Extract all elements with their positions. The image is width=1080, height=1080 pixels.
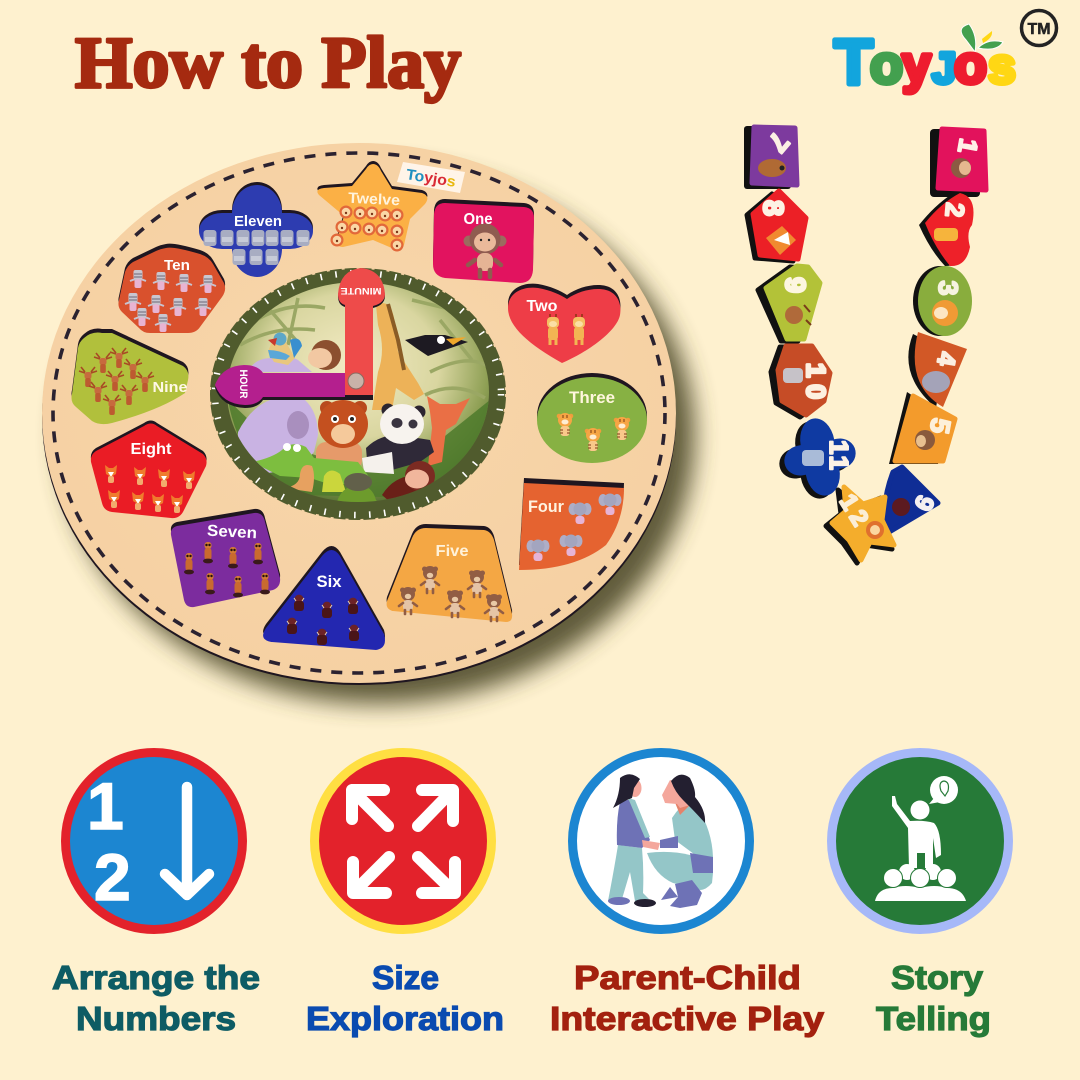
piece 7 (744, 126, 797, 189)
piece 6: 6 (909, 491, 941, 516)
hour hand (215, 365, 345, 408)
trademark symbol: TM (1027, 21, 1051, 38)
piece 3 (913, 266, 972, 336)
child (608, 774, 656, 907)
piece slot: Two: Two (526, 298, 558, 315)
parrot (268, 342, 295, 365)
piece slot: Twelve (317, 161, 427, 252)
piece 11: 11 (824, 440, 854, 470)
piece slot: Five: Five (436, 543, 469, 560)
icon: storytelling (832, 752, 1008, 930)
loose number pieces chain (744, 126, 986, 563)
title: How to Play (75, 22, 461, 103)
piece 5: 5 (924, 416, 956, 436)
piece 11 (773, 412, 862, 505)
label: parent-child interactive play (550, 959, 825, 1037)
piece 6 (876, 467, 941, 540)
monkey bottom (382, 477, 432, 500)
logo: Toyjos: J (932, 44, 956, 93)
icon: size exploration (314, 752, 492, 930)
label: parent-child interactive play: Parent-Child (574, 959, 801, 996)
piece 3: 3 (933, 280, 963, 296)
piece 2: 2 (939, 201, 971, 219)
piece slot: Eleven: Eleven (234, 213, 282, 230)
piece slot: Seven: Seven (207, 523, 257, 542)
piece slot: Two (508, 284, 620, 363)
turtle (338, 488, 376, 502)
piece slot: Ten (118, 244, 225, 333)
piece 12 (826, 487, 894, 563)
logo: Toyjos (834, 24, 1016, 98)
piece 10 (771, 346, 831, 417)
crocodile (252, 444, 370, 486)
piece slot: Four (519, 478, 624, 570)
brand sticker on board: Toyjos (405, 166, 457, 191)
icon: arrange the numbers: 2 (94, 840, 131, 914)
piece 4 (908, 332, 967, 408)
label: size exploration: Size (372, 959, 439, 996)
wooden clock board (42, 143, 676, 685)
elephant (252, 358, 312, 372)
piece slot: Ten: Ten (164, 257, 190, 274)
icon: arrange the numbers: 1 (87, 769, 124, 843)
piece slot: Eight (91, 420, 207, 518)
piece 2 (919, 193, 974, 266)
piece slot: Four: Four (528, 497, 564, 516)
minute hand (338, 268, 385, 400)
piece 1 (930, 129, 986, 197)
board shadow (61, 168, 695, 704)
piece 8: 8 (758, 200, 789, 216)
snake (291, 465, 314, 492)
monkey top (311, 340, 341, 370)
piece slot: Six: Six (316, 572, 342, 591)
piece slot: Twelve: Twelve (348, 190, 400, 209)
trademark symbol (1022, 10, 1056, 46)
piece 12: 12 (834, 490, 874, 531)
toucan (405, 335, 468, 356)
frog (322, 470, 346, 492)
piece slot: Nine (72, 329, 188, 424)
piece 5 (889, 392, 956, 464)
label: size exploration (306, 959, 504, 1037)
label: arrange the numbers: Numbers (76, 1000, 236, 1037)
label: arrange the numbers: Arrange the (52, 959, 260, 996)
logo: Toyjos: y (902, 36, 931, 94)
piece slot: Eleven (199, 182, 313, 277)
icon: parent and child (572, 752, 750, 930)
piece 8 (747, 191, 806, 261)
label: arrange the numbers (52, 959, 260, 1037)
mother (642, 775, 713, 908)
piece 7: 7 (762, 126, 795, 158)
piece slot: Three (537, 373, 647, 463)
logo: Toyjos: o (870, 35, 903, 95)
piece 10: 10 (801, 363, 831, 399)
hour hand: HOUR (237, 370, 249, 399)
label: story telling: Story (891, 959, 984, 996)
piece slot: Three: Three (569, 388, 615, 407)
logo: Toyjos: T (834, 26, 873, 98)
label: parent-child interactive play: Interactive Play (550, 1000, 825, 1037)
giraffe (372, 303, 424, 410)
label: story telling (876, 959, 991, 1037)
brand sticker on board (397, 162, 465, 193)
logo: Toyjos: o (954, 35, 987, 95)
deer (427, 396, 470, 466)
minute hand: MINUTE (340, 285, 382, 296)
piece slot: Nine: Nine (152, 379, 188, 396)
piece 4: 4 (931, 350, 961, 368)
piece slot: Six (263, 546, 385, 650)
logo: Toyjos: s (988, 38, 1016, 94)
icon: arrange the numbers (66, 752, 242, 930)
piece slot: One: One (464, 211, 493, 228)
piece slot: Five (387, 524, 512, 622)
piece slot: Eight: Eight (130, 441, 172, 458)
label: story telling: Telling (876, 1000, 991, 1037)
piece slot: One (433, 199, 534, 283)
clock centre: jungle scene (210, 268, 506, 520)
piece 9 (758, 266, 820, 341)
piece 9: 9 (780, 277, 811, 293)
bear (316, 442, 362, 466)
piece 1: 1 (952, 136, 984, 156)
label: size exploration: Exploration (306, 1000, 504, 1037)
panda (366, 436, 434, 470)
piece slot: Seven (171, 509, 280, 607)
